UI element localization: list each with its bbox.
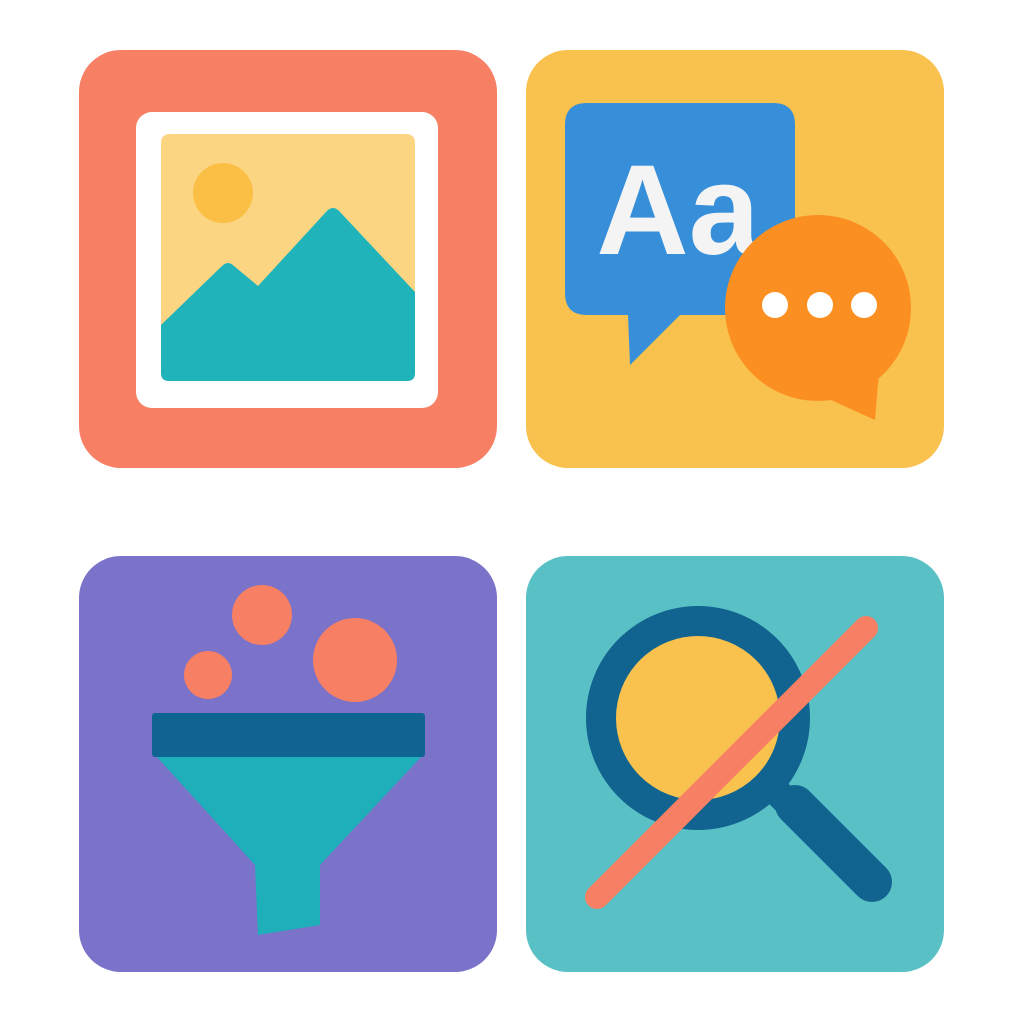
icon: particles [184, 585, 397, 702]
icon: funnel [152, 713, 425, 935]
icon: blue speech bubble with Aa: Aa [596, 139, 761, 282]
icon: magnifier [601, 621, 872, 882]
icon: orange chat bubble [725, 215, 911, 420]
icon: blue speech bubble with Aa [565, 103, 795, 365]
icon: strike line [597, 628, 866, 897]
icon: picture frame [136, 112, 438, 408]
panel: no search icon [526, 556, 944, 972]
panel: funnel filter icon [79, 556, 497, 972]
panel: image icon [79, 50, 497, 468]
panel: text chat icon [526, 50, 944, 468]
